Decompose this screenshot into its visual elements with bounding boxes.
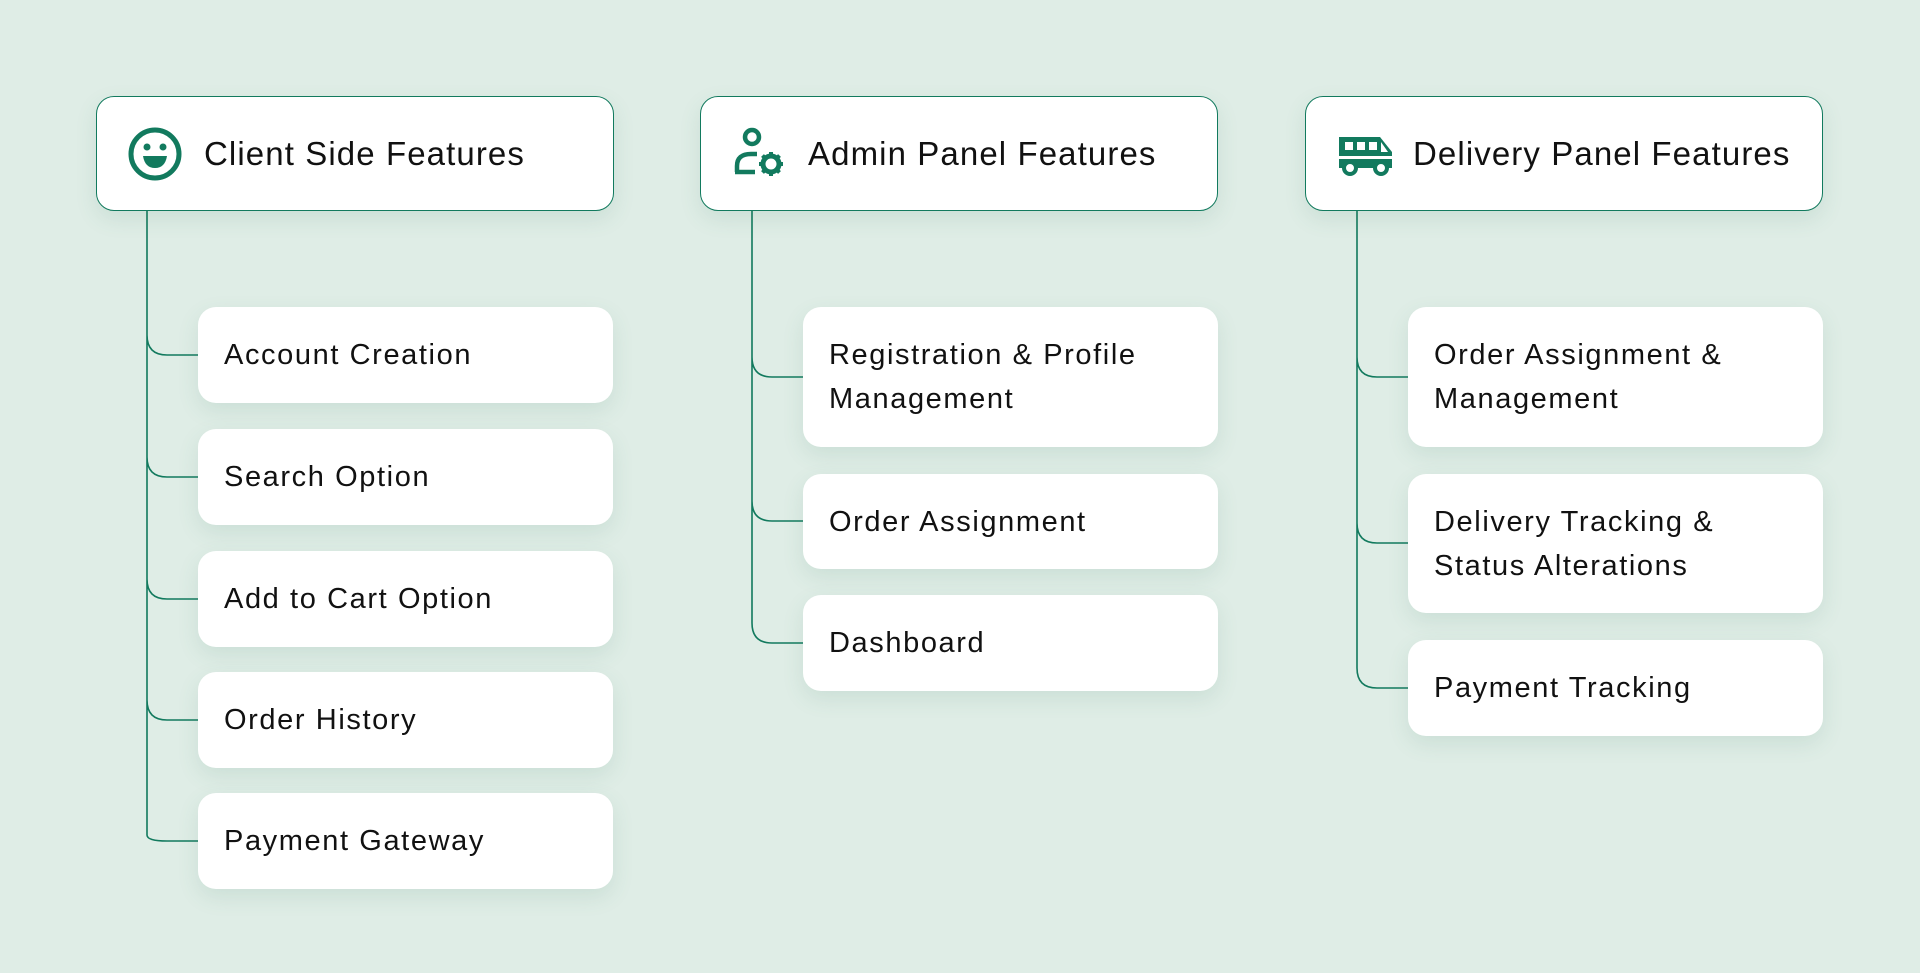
item: order history — [198, 672, 613, 768]
item: order assignment & management: Management — [1434, 383, 1619, 415]
item: delivery tracking — [1408, 474, 1823, 613]
item: order assignment: Order Assignment — [829, 506, 1087, 538]
item: search option — [198, 429, 613, 525]
connector lines — [146, 211, 198, 842]
item: payment tracking — [1408, 640, 1823, 736]
item: registration & profile — [803, 307, 1218, 447]
connector lines — [1356, 211, 1408, 689]
item: add to cart: Add to Cart Option — [224, 583, 493, 615]
item: order history: Order History — [224, 704, 417, 736]
header: delivery panel features — [1305, 96, 1823, 211]
item: add to cart — [198, 551, 613, 647]
item: order assignment — [803, 474, 1218, 569]
item: account creation: Account Creation — [224, 339, 472, 371]
item: dashboard — [803, 595, 1218, 691]
header: client side features — [96, 96, 614, 211]
icon: smiley — [128, 128, 182, 180]
item: payment gateway — [198, 793, 613, 889]
item: order assignment & management: Order Assignment & — [1434, 339, 1722, 371]
header: admin panel features — [700, 96, 1218, 211]
item: dashboard: Dashboard — [829, 627, 985, 659]
item: delivery tracking: Delivery Tracking & — [1434, 506, 1714, 538]
item: payment gateway: Payment Gateway — [224, 825, 485, 857]
item: order assignment & management — [1408, 307, 1823, 447]
icon: user with gear — [734, 128, 783, 176]
item: account creation — [198, 307, 613, 403]
item: search option: Search Option — [224, 461, 430, 493]
item: payment tracking: Payment Tracking — [1434, 672, 1692, 704]
header: delivery panel features: Delivery Panel Features — [1413, 135, 1790, 172]
column: delivery panel — [1302, 96, 1826, 747]
item: registration & profile: Registration & Profile — [829, 339, 1137, 371]
item: registration & profile: Management — [829, 383, 1014, 415]
column: client side — [93, 96, 617, 900]
icon: delivery van — [1339, 137, 1392, 176]
connector lines — [751, 211, 803, 644]
column: admin panel — [697, 96, 1221, 702]
item: delivery tracking: Status Alterations — [1434, 550, 1688, 582]
header: admin panel features: Admin Panel Features — [808, 135, 1157, 172]
header: client side features: Client Side Features — [204, 135, 525, 172]
